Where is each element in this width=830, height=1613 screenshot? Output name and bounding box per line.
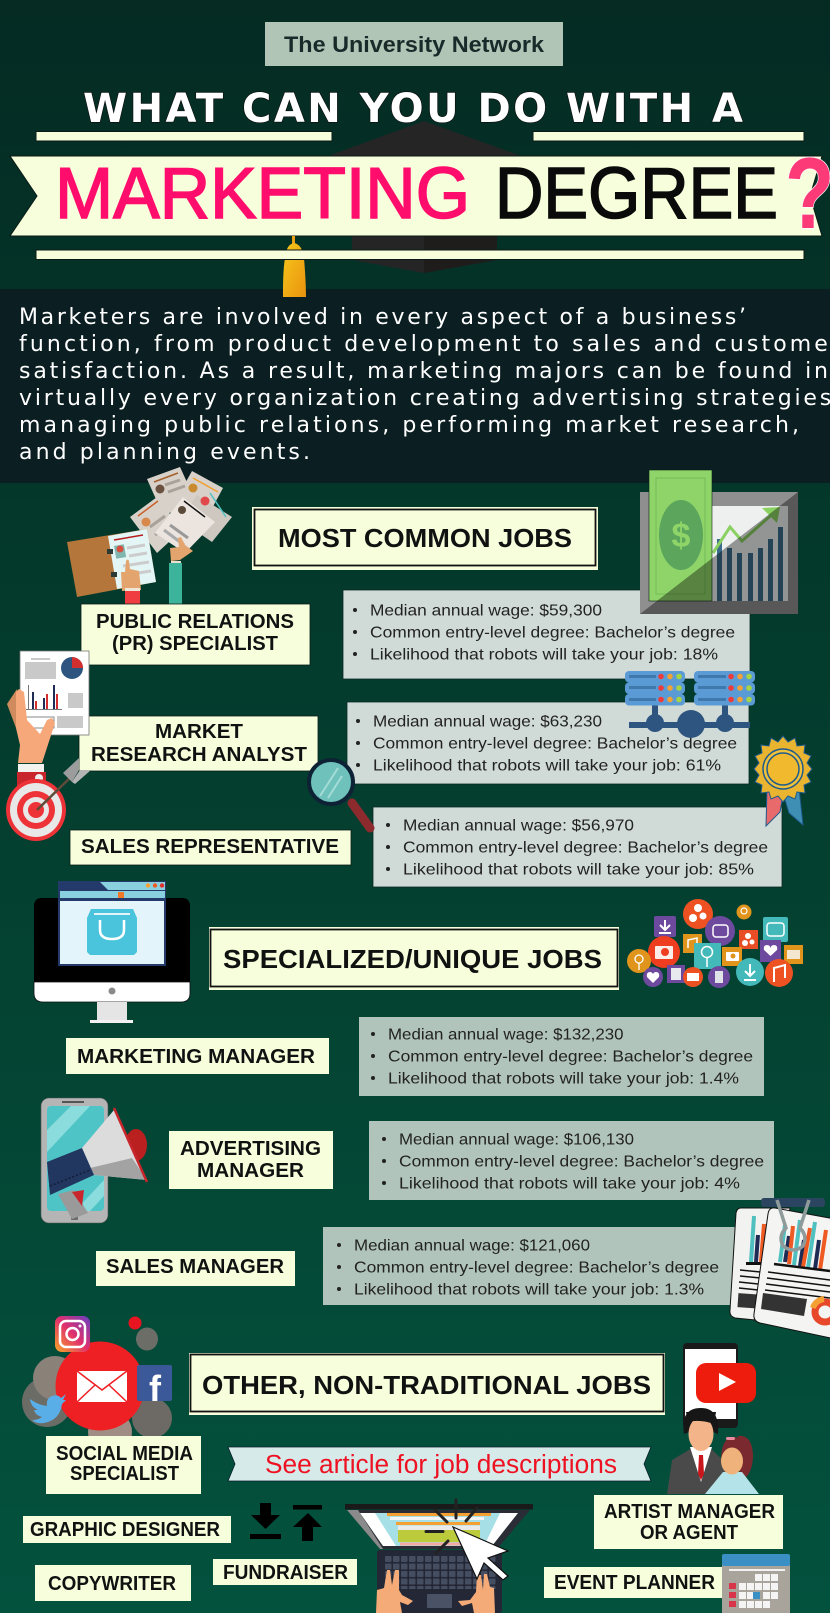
icon: social media cluster: f	[149, 1368, 162, 1409]
label: PR specialist: (PR) SPECIALIST	[112, 633, 278, 655]
icon: clipped reports	[730, 1198, 830, 1340]
icon: laptop with cursor	[345, 1500, 533, 1613]
label: sales representative: SALES REPRESENTATIVE	[81, 836, 339, 858]
label: graphic designer: GRAPHIC DESIGNER	[30, 1519, 221, 1541]
label: marketing manager: MARKETING MANAGER	[77, 1046, 316, 1068]
label: advertising manager	[169, 1131, 333, 1189]
intro paragraph: satisfaction. As a result, marketing majors can be found in	[19, 359, 828, 384]
info box: sales representative: Likelihood that robots will take your job: 85%	[403, 862, 754, 878]
info box: marketing manager: Likelihood that robots will take your job: 1.4%	[388, 1070, 739, 1088]
icon: calendar	[722, 1554, 790, 1613]
title word: degree: DEGREE	[495, 154, 778, 234]
intro band background	[0, 289, 830, 483]
info box: market research analyst	[347, 702, 749, 784]
label: sales representative	[70, 830, 351, 865]
intro paragraph: managing public relations, performing market research,	[19, 413, 799, 438]
icon: download and upload arrows	[250, 1503, 322, 1541]
icon: money and chart: $	[672, 517, 691, 555]
info box: marketing manager: Median annual wage: $132,230	[388, 1026, 624, 1044]
intro paragraph	[19, 305, 830, 465]
label: advertising manager: MANAGER	[197, 1160, 305, 1182]
label: social media specialist: SOCIAL MEDIA	[56, 1443, 193, 1465]
info box: market research analyst: Likelihood that robots will take your job: 61%	[373, 758, 721, 774]
label: marketing manager	[66, 1038, 329, 1074]
info box: sales manager: Median annual wage: $121,060	[354, 1238, 590, 1254]
info box: sales representative: Median annual wage: $56,970	[403, 818, 634, 834]
icon: social media cluster	[22, 1316, 172, 1454]
intro paragraph: virtually every organization creating advertising strategies,	[19, 386, 830, 411]
label: sales manager	[96, 1251, 295, 1286]
info box: sales manager	[323, 1227, 735, 1305]
info box: PR specialist: Common entry-level degree: Bachelor’s degree	[370, 624, 735, 642]
info box: sales representative: Common entry-level degree: Bachelor’s degree	[403, 840, 768, 856]
icon: phone with video play button	[683, 1343, 756, 1428]
title line: WHAT CAN YOU DO WITH A	[83, 86, 743, 132]
graduation cap	[328, 121, 521, 273]
info box: sales representative	[373, 807, 782, 887]
heading: most common jobs	[252, 507, 598, 570]
intro paragraph: and planning events.	[19, 440, 310, 465]
info box: advertising manager: Common entry-level degree: Bachelor’s degree	[399, 1154, 764, 1170]
title ribbon	[10, 154, 822, 236]
icon: desktop monitor with shopping window	[34, 881, 190, 1023]
label: artist manager or agent: OR AGENT	[640, 1522, 738, 1544]
icon: resumes and folder	[67, 467, 232, 610]
label: market research analyst: RESEARCH ANALYST	[91, 744, 307, 766]
publisher badge: The University Network	[284, 32, 545, 57]
info box: sales manager: Likelihood that robots will take your job: 1.3%	[354, 1282, 704, 1298]
icon: phone with megaphone	[41, 1098, 147, 1223]
heading: specialized/unique jobs	[209, 927, 619, 990]
info box: marketing manager	[359, 1017, 764, 1096]
label: PR specialist	[81, 604, 310, 665]
tassel	[283, 236, 306, 297]
banner: see article	[228, 1447, 651, 1481]
info box: market research analyst: Median annual wage: $63,230	[373, 714, 602, 730]
icon: app icon cloud	[627, 899, 803, 988]
label: sales manager: SALES MANAGER	[106, 1256, 285, 1278]
info box: advertising manager: Likelihood that robots will take your job: 4%	[399, 1176, 740, 1192]
icon: magnifier	[309, 760, 370, 828]
icon: servers	[625, 671, 755, 738]
icon: medal	[754, 736, 812, 826]
heading: most common jobs: MOST COMMON JOBS	[278, 523, 572, 553]
label: advertising manager: ADVERTISING	[180, 1138, 321, 1160]
label: copywriter: COPYWRITER	[48, 1573, 177, 1595]
info box: PR specialist: Likelihood that robots will take your job: 18%	[370, 646, 718, 664]
info box: advertising manager: Median annual wage: $106,130	[399, 1132, 634, 1148]
info box: PR specialist	[343, 590, 750, 679]
icon: hand holding report	[7, 651, 89, 790]
icon: money and chart	[640, 470, 798, 614]
label: artist manager or agent: ARTIST MANAGER	[604, 1501, 776, 1523]
icon: target with arrow	[6, 758, 91, 841]
label: copywriter	[35, 1565, 191, 1601]
intro paragraph: Marketers are involved in every aspect of a business’	[19, 305, 746, 330]
label: market research analyst	[79, 716, 318, 771]
info box: market research analyst: Common entry-level degree: Bachelor’s degree	[373, 736, 737, 752]
banner: see article: See article for job descriptions	[265, 1451, 617, 1479]
info box: advertising manager	[369, 1121, 774, 1200]
info box: marketing manager: Common entry-level degree: Bachelor’s degree	[388, 1048, 753, 1066]
label: event planner	[544, 1567, 725, 1598]
heading: other, non-traditional jobs: OTHER, NON-TRADITIONAL JOBS	[202, 1370, 651, 1400]
label: social media specialist: SPECIALIST	[70, 1463, 179, 1485]
heading: specialized/unique jobs: SPECIALIZED/UNIQUE JOBS	[223, 944, 602, 974]
info box: PR specialist: Median annual wage: $59,300	[370, 602, 602, 620]
label: event planner: EVENT PLANNER	[554, 1572, 716, 1594]
label: social media specialist	[46, 1436, 201, 1494]
info box: sales manager: Common entry-level degree: Bachelor’s degree	[354, 1260, 719, 1276]
intro paragraph: function, from product development to sales and customer	[19, 332, 830, 357]
decorative rules	[36, 132, 804, 260]
label: fundraiser: FUNDRAISER	[223, 1562, 349, 1584]
heading: other, non-traditional jobs	[189, 1353, 665, 1415]
icon: man and woman	[667, 1408, 759, 1494]
label: PR specialist: PUBLIC RELATIONS	[96, 611, 294, 633]
label: market research analyst: MARKET	[155, 721, 243, 743]
publisher badge	[265, 22, 563, 66]
title word: marketing: MARKETING	[55, 154, 470, 234]
label: artist manager or agent	[594, 1495, 783, 1549]
